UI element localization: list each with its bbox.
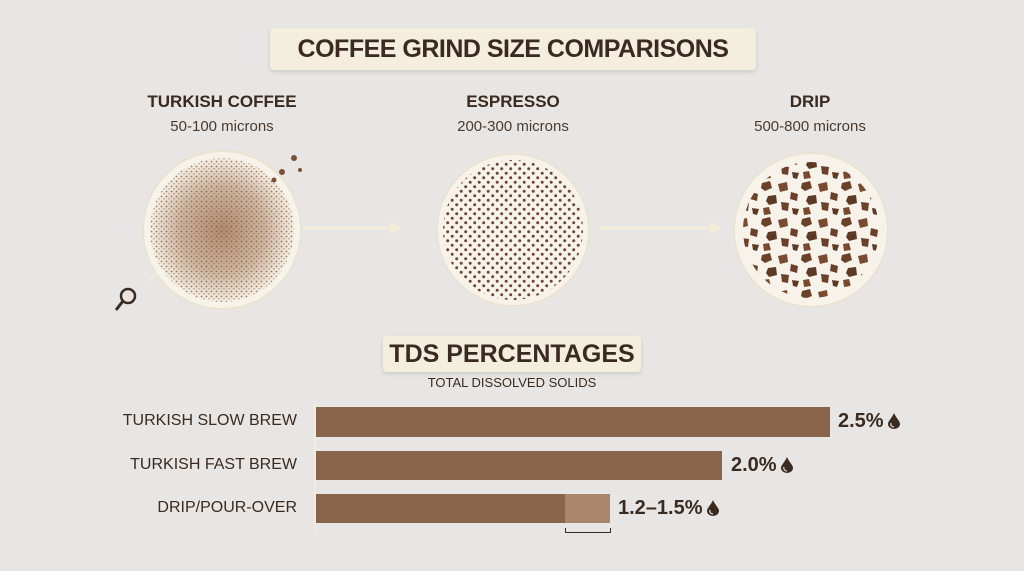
- bar: drip: [157, 494, 719, 533]
- label: espresso: ESPRESSO: [466, 92, 560, 111]
- tds heading: TDS PERCENTAGES: [389, 340, 635, 368]
- label: espresso: [457, 92, 569, 135]
- label: drip: 500-800 microns: [754, 118, 866, 135]
- bar: turkish slow: [123, 407, 900, 437]
- circle: turkish: [142, 150, 302, 310]
- bar: turkish fast: 2.0%: [731, 454, 777, 476]
- bar: drip: 1.2–1.5%: [618, 497, 703, 519]
- bar: turkish fast: [130, 451, 793, 480]
- circle: drip: [733, 152, 889, 308]
- label: turkish coffee: 50-100 microns: [170, 118, 274, 135]
- label: espresso: 200-300 microns: [457, 118, 569, 135]
- circle: espresso: [436, 153, 590, 307]
- arrow 2: [600, 221, 721, 235]
- label: drip: DRIP: [790, 92, 830, 111]
- arrow 1: [303, 221, 401, 235]
- title: [270, 28, 756, 70]
- bar: turkish slow: TURKISH SLOW BREW: [123, 412, 297, 429]
- label: turkish coffee: TURKISH COFFEE: [147, 92, 297, 111]
- label: drip: [754, 92, 866, 135]
- bar: turkish fast: TURKISH FAST BREW: [130, 456, 297, 473]
- label: turkish coffee: [147, 92, 297, 135]
- subtitle: TOTAL DISSOLVED SOLIDS: [428, 375, 596, 390]
- grind diagrams: [114, 150, 889, 311]
- bar chart: [123, 402, 900, 533]
- icon: magnifier: [116, 272, 158, 310]
- title: COFFEE GRIND SIZE COMPARISONS: [298, 35, 728, 63]
- bar: drip: DRIP/POUR-OVER: [157, 499, 297, 516]
- bar: turkish slow: 2.5%: [838, 410, 884, 432]
